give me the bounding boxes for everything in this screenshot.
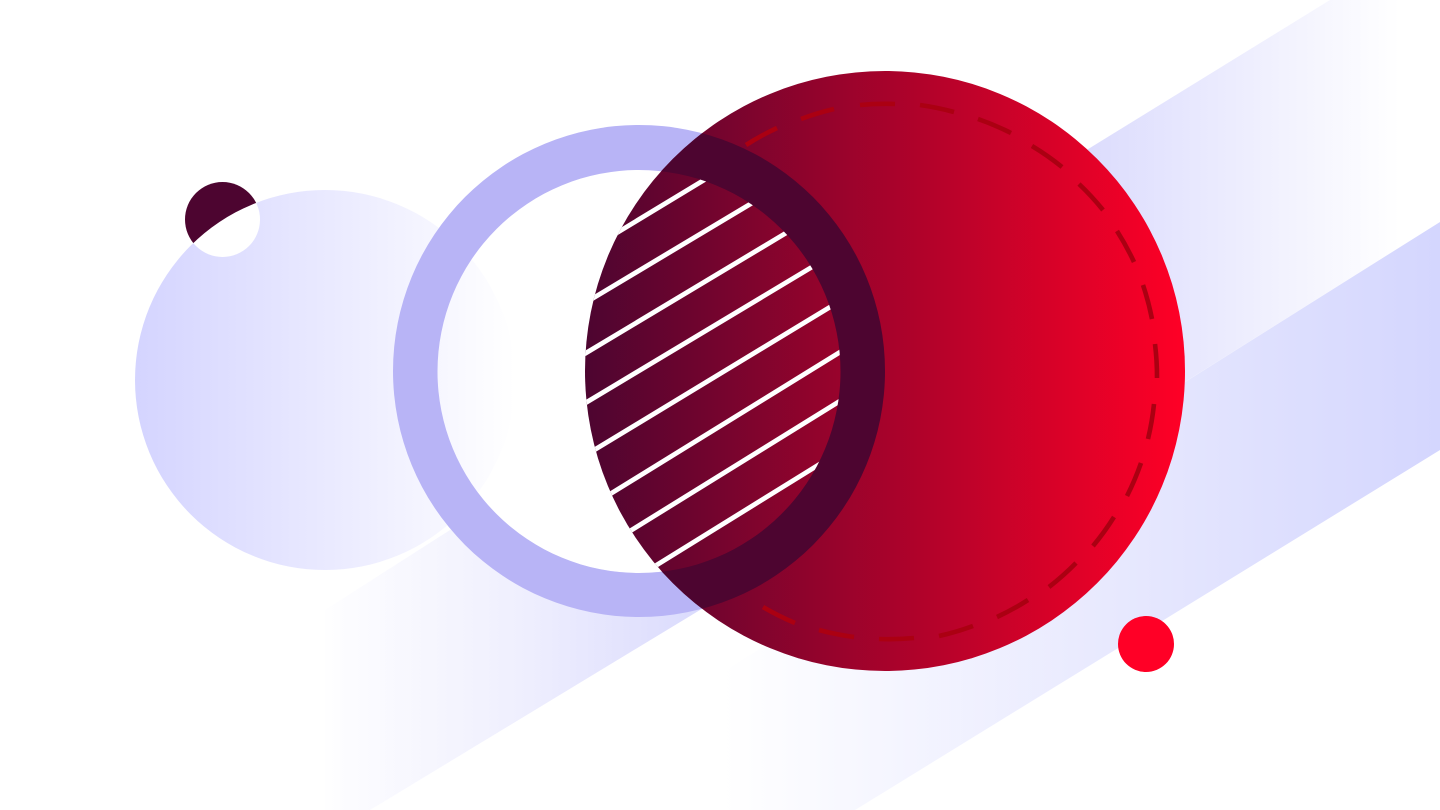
dashed circle outline — [746, 104, 1157, 639]
circle: large red gradient — [585, 71, 1185, 671]
ring hole: white disc — [438, 170, 840, 573]
band: lower right diagonal — [723, 222, 1440, 810]
band: upper right diagonal — [900, 0, 1440, 560]
ring overlap: dark plum arc — [661, 133, 885, 609]
band: lower left diagonal — [325, 440, 720, 810]
white diagonal stripes — [576, 174, 850, 571]
icon: small red dot — [1118, 616, 1174, 672]
ring: lavender — [393, 125, 885, 617]
circle: pale lavender gradient — [135, 190, 515, 570]
icon: small two-tone circle — [185, 182, 260, 257]
